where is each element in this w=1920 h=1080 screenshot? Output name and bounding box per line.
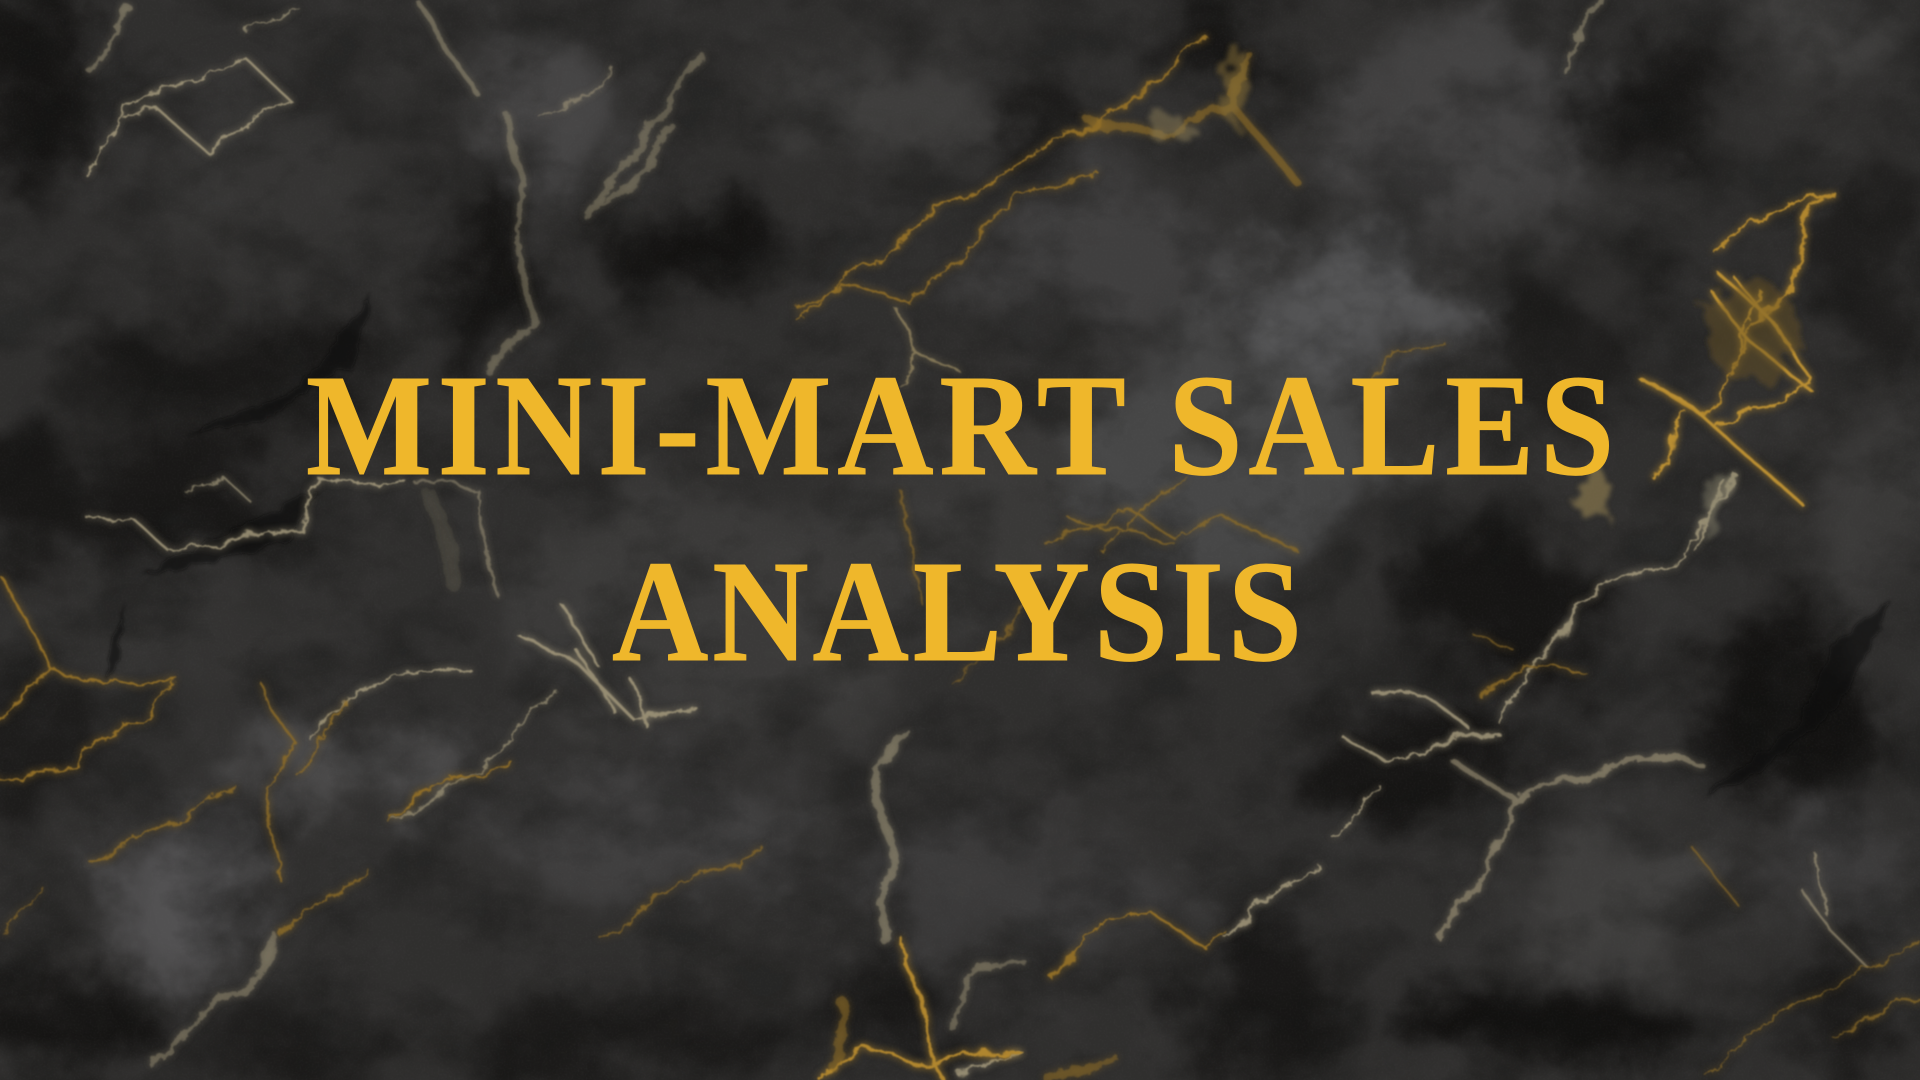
soft gold washes [1145,44,1798,540]
dark torn streaks [104,294,1892,796]
title [306,346,1614,692]
title line: MINI-MART SALES: MINI-MART SALES [306,346,1614,506]
title line: ANALYSIS: ANALYSIS [612,532,1302,692]
